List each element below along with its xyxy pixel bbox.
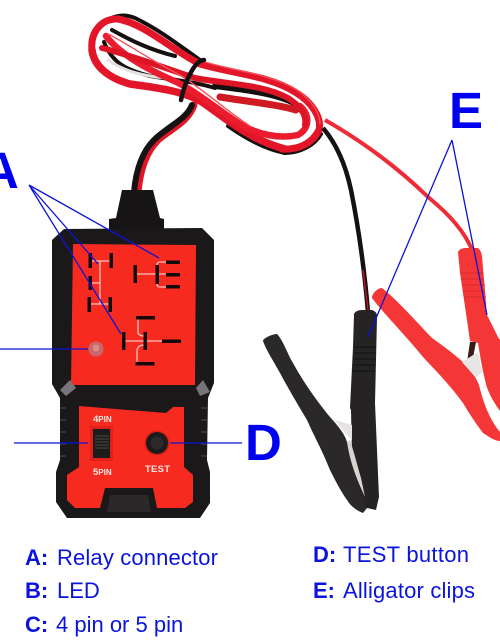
device cable: [134, 105, 194, 192]
legend: D: TEST button: [343, 542, 469, 567]
strain relief: [109, 190, 164, 230]
legend: B: B:: [25, 578, 48, 603]
legend: D: D:: [313, 542, 336, 567]
panel corner clips: [60, 380, 210, 396]
legend: B: LED: [57, 578, 100, 603]
lower red panel: [67, 406, 193, 508]
black casing: [52, 228, 214, 518]
button label: TEST: [145, 464, 170, 475]
switch label 5 pin: 5PIN: [93, 467, 112, 478]
callout letter D: D: [245, 414, 282, 471]
black alligator clip: [263, 310, 379, 513]
red alligator clip: [372, 248, 500, 441]
red lead wire: [325, 120, 473, 252]
callout letter E: E: [449, 82, 483, 139]
legend: C: C:: [25, 612, 48, 637]
legend: A: Relay connector: [57, 545, 218, 570]
casing ribs: [60, 408, 207, 456]
legend: E: E:: [313, 578, 335, 603]
cable tie: [181, 60, 204, 100]
pointer lines E: [368, 140, 487, 337]
black lead wire: [323, 128, 368, 312]
pointer line D: [170, 442, 242, 444]
legend: C: 4 pin or 5 pin: [56, 612, 183, 637]
legend: E: Alligator clips: [343, 578, 475, 603]
pointer line C: [14, 442, 88, 444]
upper red panel: [71, 244, 196, 385]
switch label 4 pin: 4PIN: [93, 414, 112, 425]
relay pin diagrams: [88, 253, 181, 366]
legend: A: A:: [25, 545, 48, 570]
cable coil: [92, 16, 321, 153]
pointer lines A: [29, 185, 159, 334]
tester body: [52, 190, 214, 518]
LED: [88, 342, 104, 356]
test button: [144, 430, 170, 456]
bottom notch: [107, 495, 151, 512]
pointer line B: [0, 348, 88, 350]
slide switch: [90, 426, 113, 461]
